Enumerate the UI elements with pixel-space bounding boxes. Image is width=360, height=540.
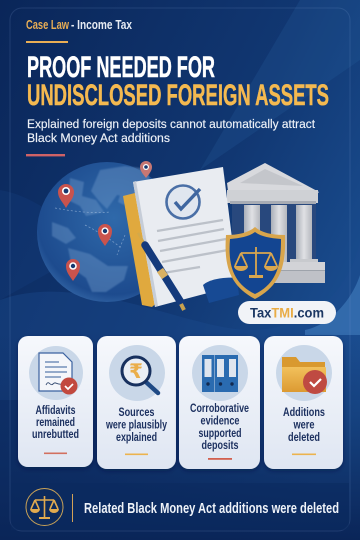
pin 4 (140, 161, 152, 178)
icon: rupee magnifier: ₹ (129, 361, 143, 383)
card text: Sources (118, 405, 155, 419)
card: affidavits (18, 336, 93, 467)
card text: supported (198, 426, 242, 440)
red accent rule (26, 154, 65, 156)
subtitle: Black Money Act additions (27, 131, 170, 145)
card text: were plausibly (105, 418, 167, 432)
card: corroborative evidence (179, 336, 260, 469)
brand pill: TaxTMI.com (250, 306, 324, 320)
icon: document with check badge (133, 167, 239, 307)
card text (105, 405, 167, 444)
card text: evidence (200, 414, 240, 428)
icon: folder with check (282, 357, 327, 394)
header label: Case Law (26, 18, 69, 32)
icon: justice shield (226, 227, 285, 299)
icon: fountain pen (138, 233, 184, 310)
card text: Affidavits (36, 403, 76, 417)
gold accent rule (26, 41, 68, 43)
header label (26, 18, 132, 32)
card text (32, 403, 79, 441)
card text: were (293, 418, 315, 432)
card text: explained (116, 430, 157, 444)
card: additions deleted (264, 336, 343, 469)
card: sources (97, 336, 176, 469)
card text (283, 405, 325, 444)
card text: Additions (283, 405, 325, 419)
icon: affidavit page (39, 353, 78, 394)
pin 3 (66, 259, 80, 281)
icon: scales of justice (26, 488, 63, 526)
header label: - Income Tax (71, 18, 132, 32)
pin 1 (58, 184, 74, 208)
title: PROOF NEEDED FOR (27, 51, 215, 84)
subtitle (27, 117, 316, 145)
icon: globe with location pins (37, 161, 177, 302)
card text: remained (36, 415, 75, 429)
pin 2 (98, 224, 112, 246)
subtitle: Explained foreign deposits cannot automatically attract (27, 117, 316, 131)
card text: deleted (288, 430, 320, 444)
brand pill (238, 301, 336, 324)
card text: unrebutted (32, 427, 79, 441)
icon: binders (202, 355, 238, 392)
icon: courthouse (227, 163, 325, 283)
icon: folder behind document (123, 193, 160, 307)
card text: Corroborative (190, 401, 249, 415)
card text: deposits (202, 438, 239, 452)
card text (190, 401, 249, 452)
title (27, 51, 329, 112)
footer conclusion band (11, 483, 349, 530)
